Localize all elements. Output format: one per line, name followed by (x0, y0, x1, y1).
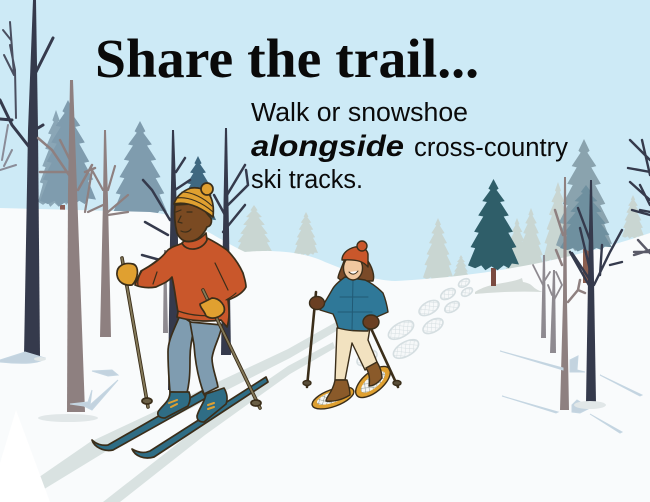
left ski (92, 391, 206, 450)
jacket seams (338, 280, 372, 330)
collar (182, 233, 207, 249)
hat ribbing (177, 192, 213, 212)
right boot (197, 388, 227, 422)
left pole (122, 258, 148, 407)
left glove (310, 296, 324, 310)
pants (335, 328, 377, 380)
snow mound under trees (34, 357, 606, 422)
bare tree: taupe tall (38, 80, 95, 412)
snow shadow near right fir (475, 278, 543, 294)
sweater details (138, 263, 236, 316)
blue-grey firs on the left (38, 100, 216, 239)
right leg (190, 322, 222, 394)
ski tracks (3, 322, 338, 502)
facial features (176, 210, 192, 232)
teal fir tree (468, 179, 519, 286)
hat (342, 247, 368, 267)
hat pompom (357, 241, 367, 251)
skier (92, 183, 268, 458)
subtitle line 1: Walk or snowshoe (251, 99, 468, 127)
bottom-left snow drift (0, 410, 50, 502)
left boot (326, 380, 350, 401)
bare tree: faded far left branches (0, 22, 16, 170)
hat (174, 188, 213, 217)
subtitle emphasis: alongside (251, 130, 404, 163)
bare trees on the right (533, 255, 562, 353)
right glove (363, 315, 379, 329)
pale distant trees (236, 182, 644, 284)
left boot (158, 392, 190, 418)
bare tree: taupe right (555, 177, 585, 410)
snowshoer (303, 241, 401, 414)
left pole (307, 292, 316, 387)
right snowshoe (350, 361, 396, 403)
bare branches at right edge (628, 140, 650, 255)
smile (349, 271, 358, 274)
face (344, 256, 362, 280)
right ski (132, 377, 268, 458)
bare tree: small taupe (85, 130, 128, 337)
sweater (135, 238, 246, 327)
subtitle line 3: ski tracks. (251, 166, 363, 194)
right boot (366, 362, 382, 386)
left glove (117, 263, 137, 285)
snow shadows (0, 351, 642, 433)
bare tree: dark right (570, 180, 622, 403)
right pole basket (393, 380, 401, 386)
jacket (320, 277, 388, 331)
title: Share the trail... (95, 28, 479, 89)
hair (338, 258, 374, 281)
blue-grey fir on the right (556, 139, 612, 283)
left snowshoe (309, 382, 357, 414)
left snowshoe webbing (315, 386, 351, 408)
left pole basket (303, 380, 311, 386)
right pole basket (251, 400, 261, 406)
right pole (363, 311, 398, 387)
face (175, 204, 211, 242)
left leg (168, 315, 195, 393)
bare trees behind the skier (142, 128, 248, 390)
snow ground (0, 208, 650, 502)
snowshoe footprints (354, 277, 474, 369)
subtitle line 2: cross-country (414, 134, 568, 162)
boot buckles (169, 400, 214, 409)
left pole basket (142, 398, 152, 404)
bare tree: dark left (0, 0, 53, 356)
thin tree behind skier (163, 250, 168, 333)
right pole (203, 290, 260, 408)
right snowshoe webbing (358, 368, 388, 396)
hat pompom (201, 183, 213, 195)
right glove (200, 298, 224, 318)
